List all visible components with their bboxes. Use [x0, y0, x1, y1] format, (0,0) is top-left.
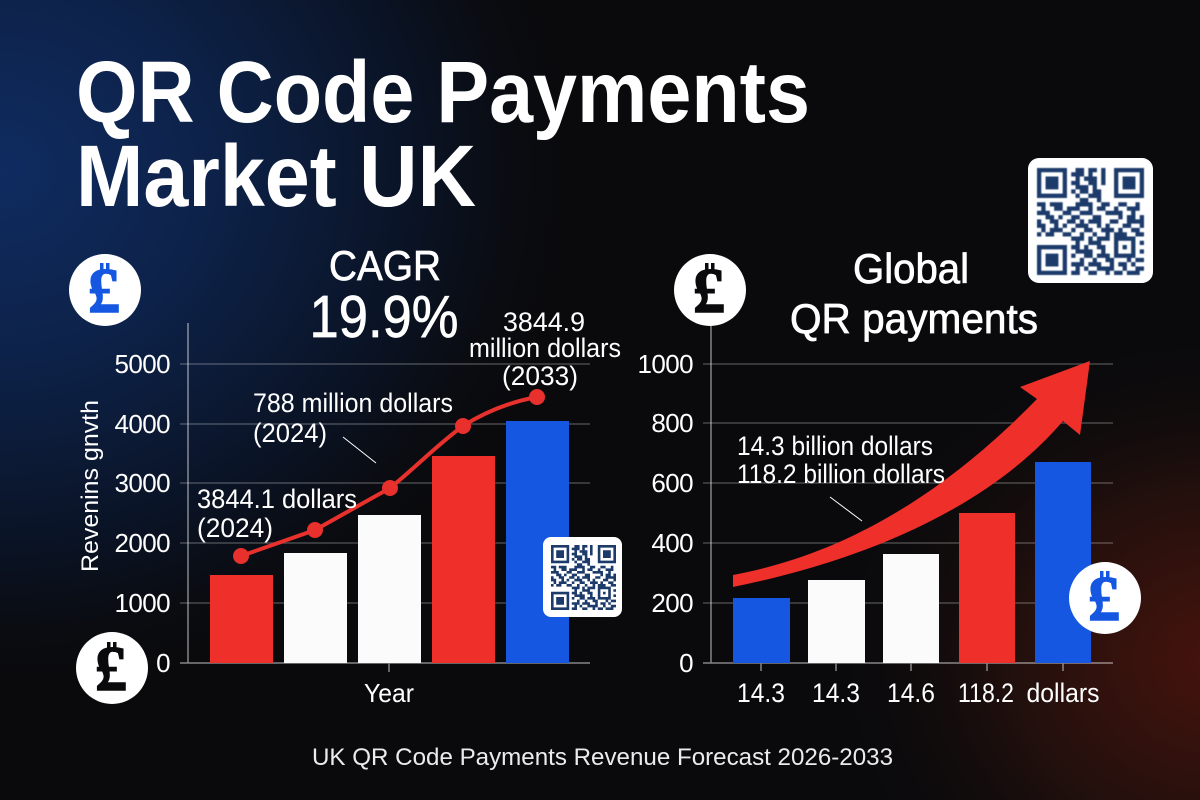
callout: 788 million dollars: [253, 388, 453, 463]
callout: billion dollars: 118.2 billion dollars: [737, 459, 945, 489]
callout: 3844.9 million dollars: (2033): [502, 361, 578, 391]
y axis labels: 0: [679, 648, 693, 678]
callout: billion dollars: [737, 431, 945, 521]
bars: [733, 462, 1091, 663]
callout: 3844.9 million dollars: million dollars: [469, 333, 621, 363]
title: [76, 44, 810, 225]
callout: 3844.1 dollars: (2024): [197, 513, 273, 543]
arrow: growth: [733, 361, 1090, 587]
y axis labels: [115, 349, 170, 678]
callout: billion dollars: 14.3 billion dollars: [737, 431, 933, 461]
panel: global QR payments chart: [638, 245, 1113, 708]
y axis labels: 1000: [638, 349, 693, 379]
callout: 3844.9 million dollars: [469, 307, 621, 391]
y axis labels: [638, 349, 693, 678]
icon: black pound coin: £: [95, 633, 127, 704]
CAGR heading: [310, 242, 458, 350]
icon: top black pound coin: £: [693, 255, 725, 326]
y axis labels: 4000: [115, 409, 170, 439]
y axis title: Revenins gnvth: [77, 400, 104, 572]
callout: 788 million dollars: 788 million dollars: [253, 388, 453, 418]
x axis labels: [737, 678, 1100, 708]
y axis labels: 3000: [115, 468, 170, 498]
icon: small QR code: [543, 537, 622, 617]
grid and axes: [180, 323, 590, 672]
y axis labels: 2000: [115, 528, 170, 558]
panel: CAGR revenue chart: [77, 242, 621, 708]
global heading: Global: [853, 245, 969, 292]
CAGR heading: 19.9%: [310, 284, 458, 350]
y axis labels: 200: [651, 588, 693, 618]
y axis labels: 5000: [115, 349, 170, 379]
y axis labels: 600: [651, 468, 693, 498]
callout: 3844.1 dollars: [197, 484, 357, 543]
callout: 3844.1 dollars: 3844.1 dollars: [197, 484, 357, 514]
growth line: [233, 389, 545, 564]
callout: 788 million dollars: (2024): [253, 418, 327, 448]
x axis labels: 14.3: [737, 678, 785, 708]
icon: blue pound coin: £: [88, 255, 120, 326]
icon: large QR code: [1028, 158, 1153, 283]
x axis title: Year: [364, 678, 414, 708]
y axis labels: 1000: [115, 588, 170, 618]
icon: blue pound coin on bar: £: [1088, 563, 1120, 634]
icon: blue pound coin on bar: [1069, 562, 1141, 634]
icon: blue pound coin: [69, 254, 141, 326]
x axis labels: 14.3: [812, 678, 860, 708]
callout: 3844.9 million dollars: 3844.9: [503, 307, 585, 337]
x axis labels: 14.6: [887, 678, 935, 708]
global heading: QR payments: [790, 295, 1038, 342]
bars: [210, 421, 569, 663]
grid and axes: [703, 326, 1113, 671]
x axis labels: 118.2: [958, 678, 1014, 708]
footer caption: UK QR Code Payments Revenue Forecast 2026-2033: [312, 744, 893, 771]
x axis labels: dollars: [1026, 678, 1100, 708]
y axis labels: 0: [156, 648, 170, 678]
title: QR Code Payments: [76, 44, 810, 141]
CAGR heading: CAGR: [329, 242, 441, 289]
y axis labels: 800: [651, 408, 693, 438]
icon: top black pound coin: [674, 254, 746, 326]
y axis labels: 400: [651, 528, 693, 558]
icon: black pound coin: [76, 632, 148, 704]
global heading: [790, 245, 1038, 342]
title: Market UK: [76, 128, 476, 225]
